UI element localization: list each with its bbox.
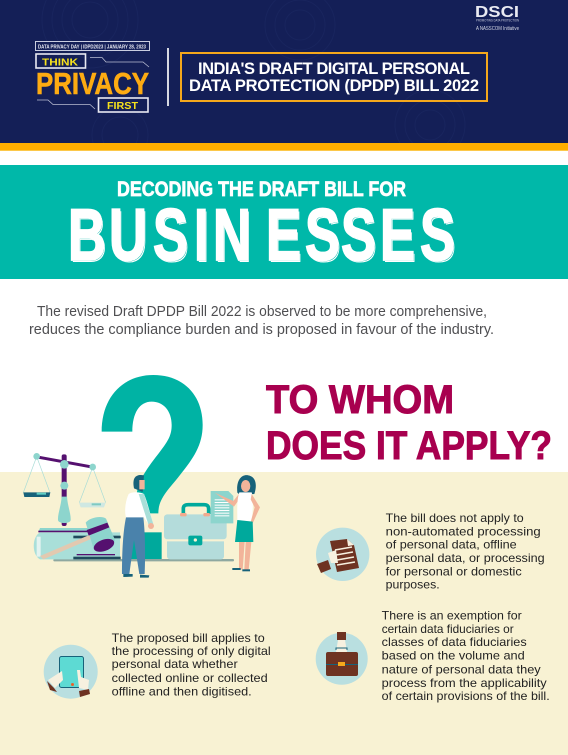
- icon: briefcase: [164, 505, 227, 559]
- text: does not apply: for personal or domestic: [386, 564, 522, 578]
- heading: to whom does it apply: [266, 378, 552, 468]
- text: exemption: There is an exemption for: [382, 608, 522, 622]
- text: does not apply: of personal data, offline: [386, 538, 517, 552]
- text: exemption: of certain provisions of the bill.: [382, 689, 550, 703]
- panel: digital data note: [44, 631, 271, 699]
- text: digital personal data: collected online or collected: [112, 671, 268, 685]
- intro text: The revised Draft DPDP Bill 2022 is observed to be more comprehensive,: [37, 303, 487, 320]
- icon: question mark: [102, 375, 203, 560]
- icon: hand holding briefcase: [316, 632, 368, 685]
- heading: businesses: BUSINESSES: [68, 195, 455, 276]
- text: exemption: classes of data fiduciaries: [382, 635, 527, 649]
- icon: books and gavel: [34, 517, 121, 559]
- text: digital personal data: personal data whether: [112, 657, 238, 671]
- icon: scales of justice: [23, 453, 106, 526]
- logo: Think Privacy First: THINK: [42, 56, 78, 68]
- panel: non-automated processing note: [316, 511, 545, 592]
- ground line: [53, 559, 234, 561]
- panel: cream background: [0, 472, 568, 755]
- text: exemption: process from the applicability: [382, 676, 547, 690]
- intro text: reduces the compliance burden and is proposed in favour of the industry.: [29, 321, 494, 338]
- divider: [167, 48, 169, 106]
- text: exemption: nature of personal data they: [382, 662, 541, 676]
- logo: Think Privacy First: FIRST: [107, 101, 138, 112]
- text: digital personal data: offline and then digitised.: [112, 684, 252, 698]
- intro text: [29, 303, 494, 338]
- illustration: question mark, scales, people and briefcase: [23, 375, 260, 578]
- title box: [181, 53, 487, 101]
- text: exemption: based on the volume and: [382, 648, 525, 662]
- text: exemption: [382, 608, 550, 703]
- heading: businesses: BUSINESSES: [69, 197, 456, 278]
- text: does not apply: The bill does not apply to: [386, 511, 524, 525]
- logo: Think Privacy First: [36, 42, 150, 112]
- text: does not apply: personal data, or processing: [386, 551, 545, 565]
- logo: DSCI: DSCI: [475, 4, 519, 21]
- logo: DSCI: [475, 4, 519, 32]
- title box: DATA PROTECTION (DPDP) BILL 2022: [189, 77, 479, 95]
- heading: businesses: BUSINESSES: [69, 196, 456, 277]
- heading: to whom does it apply: TO WHOM: [266, 378, 454, 422]
- panel: exemption note: [316, 608, 550, 703]
- logo: DSCI: PROMOTING DATA PROTECTION: [476, 18, 519, 22]
- heading: decoding the draft bill: DECODING THE DRAFT BILL FOR: [117, 177, 406, 201]
- panel: header banner: [0, 0, 568, 163]
- icon: hand holding document: [316, 528, 369, 581]
- panel: teal title band: [0, 165, 568, 279]
- text: digital personal data: [112, 631, 271, 698]
- icon: woman holding document: [211, 475, 260, 571]
- text: digital personal data: the processing of only digital: [112, 644, 271, 658]
- icon: hands holding tablet: [44, 645, 98, 699]
- icon: man: [122, 475, 154, 578]
- text: does not apply: [386, 511, 545, 592]
- text: exemption: certain data fiduciaries or: [382, 622, 514, 636]
- logo: DSCI: A NASSCOM Initiative: [476, 26, 519, 32]
- text: does not apply: non-automated processing: [386, 524, 541, 538]
- text: digital personal data: The proposed bill applies to: [112, 631, 265, 645]
- title box: INDIA'S DRAFT DIGITAL PERSONAL: [198, 60, 470, 78]
- text: does not apply: purposes.: [386, 578, 440, 592]
- logo: Think Privacy First: DATA PRIVACY DAY | IDPD2023 | JANUARY 28, 2023: [38, 44, 146, 50]
- logo: Think Privacy First: PRIVACY: [36, 66, 149, 101]
